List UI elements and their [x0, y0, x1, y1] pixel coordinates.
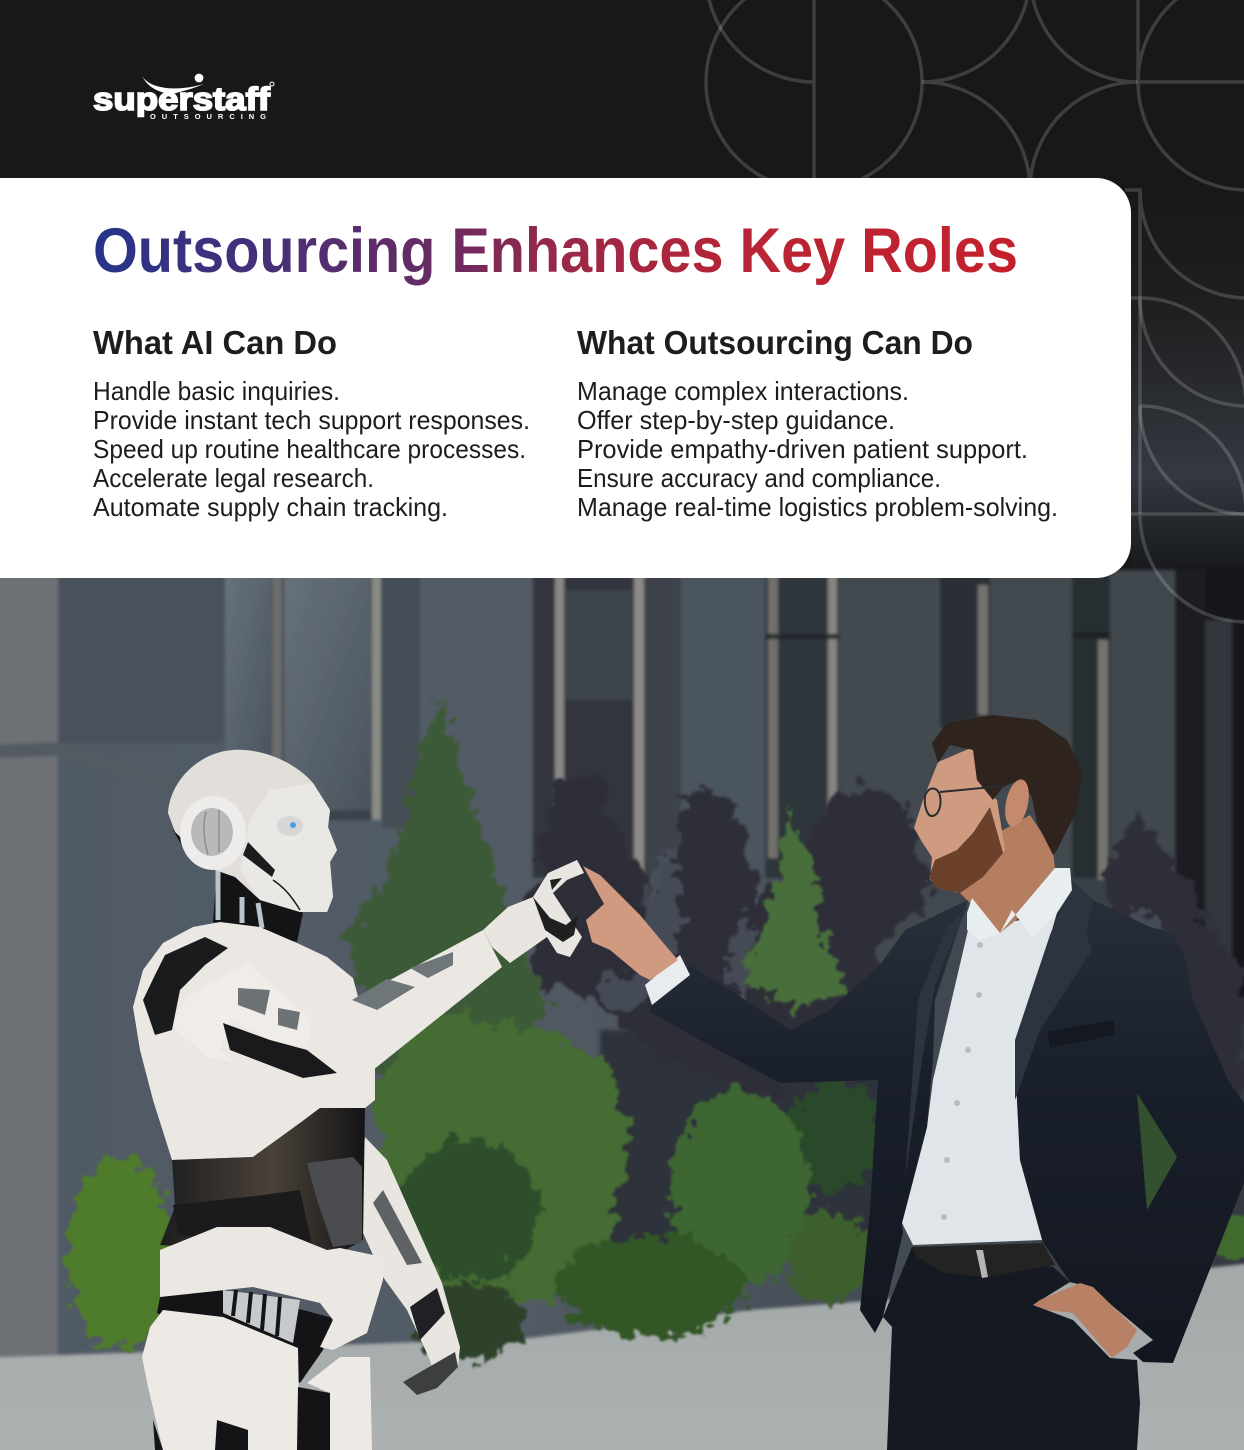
robot forearm vents	[352, 952, 453, 1010]
list: outsourcing capabilities: Provide empathy-driven patient support.	[577, 434, 1028, 464]
robot far leg	[307, 1357, 372, 1450]
gap between sleeve and body	[1137, 1093, 1177, 1210]
right edge fade into building	[1131, 190, 1244, 620]
robot cables	[218, 870, 262, 928]
white content panel	[0, 178, 1131, 578]
robot forearm	[310, 930, 502, 1090]
dark wall base behind garden	[600, 1030, 890, 1250]
logo figure head	[195, 74, 203, 82]
robot ear disc	[191, 808, 233, 856]
conifer upper	[345, 695, 550, 1090]
far arm shell	[360, 1137, 460, 1387]
list: outsourcing capabilities: Ensure accuracy and compliance.	[577, 463, 941, 493]
rib gaps	[233, 1290, 280, 1336]
robot hand	[483, 860, 584, 963]
rib base	[223, 1290, 300, 1343]
robot eye	[290, 822, 296, 828]
man neck	[957, 815, 1057, 933]
man pointing hand	[583, 866, 678, 980]
robot face	[240, 783, 337, 912]
list: AI capabilities: Provide instant tech support responses.	[93, 405, 530, 435]
robot eye socket	[277, 816, 303, 836]
heading: what AI can do: What AI Can Do	[93, 324, 337, 361]
pavement	[0, 1262, 1244, 1450]
list: AI capabilities: Accelerate legal research.	[93, 463, 374, 493]
far arm wrist	[410, 1288, 445, 1340]
robot hand joints	[533, 878, 578, 942]
conifer shadow	[400, 1140, 540, 1280]
heading: what outsourcing can do: What Outsourcing Can Do	[577, 324, 973, 361]
list: outsourcing capabilities: Offer step-by-step guidance.	[577, 405, 895, 435]
man cuff	[645, 955, 690, 1005]
shrub highlights	[595, 850, 1163, 1008]
photo: building and garden backdrop	[0, 570, 1244, 1450]
photo: businessman	[583, 715, 1244, 1450]
logo swoosh	[142, 76, 204, 94]
robot head	[168, 750, 337, 912]
list: outsourcing capabilities: Manage real-time logistics problem-solving.	[577, 492, 1058, 522]
logo tagline: OUTSOURCING	[150, 112, 266, 121]
dark header background	[0, 0, 1244, 640]
robot far arm	[360, 1137, 460, 1395]
man collar	[967, 868, 1072, 940]
far arm vent	[373, 1190, 422, 1265]
man hand in pocket	[1033, 1283, 1137, 1358]
robot shoulder dark	[143, 937, 228, 1035]
round green bushes	[68, 1080, 1244, 1360]
robot thigh cutout	[215, 1420, 248, 1450]
robot leg gap	[297, 1387, 330, 1450]
robot cheek line	[273, 880, 300, 910]
logo wordmark: superstaff	[93, 81, 270, 117]
green accent tree	[745, 812, 845, 1010]
list: AI capabilities: Speed up routine healthcare processes.	[93, 434, 526, 464]
robot jaw plate	[243, 842, 275, 877]
man beard	[929, 807, 1003, 893]
robot side mesh	[307, 1157, 362, 1247]
photo: robot	[133, 750, 584, 1450]
list: AI capabilities: Automate supply chain tracking.	[93, 492, 448, 522]
list: AI capabilities	[93, 376, 530, 522]
man shirt	[902, 913, 1057, 1245]
robot shoulder vents	[238, 988, 300, 1030]
building column and windows	[0, 570, 1244, 1370]
man belt buckle	[976, 1250, 988, 1278]
column: what AI can do	[93, 324, 530, 522]
robot waist	[160, 1108, 365, 1257]
man glasses	[925, 786, 1003, 816]
man hair	[932, 715, 1082, 855]
robot near thigh	[142, 1310, 300, 1450]
robot upper arm plate	[175, 963, 312, 1062]
logo registered mark	[270, 82, 274, 86]
column: what outsourcing can do	[577, 324, 1058, 522]
list: outsourcing capabilities	[577, 376, 1058, 522]
far hand	[403, 1352, 458, 1395]
man face	[914, 747, 1005, 893]
geometric line pattern	[706, 0, 1244, 622]
man ear	[1001, 777, 1033, 829]
robot torso	[133, 922, 375, 1160]
title: Outsourcing Enhances Key Roles	[93, 216, 1018, 286]
list: AI capabilities: Handle basic inquiries.	[93, 376, 340, 406]
conifer lower	[375, 1010, 630, 1300]
robot rib cables	[223, 1290, 300, 1343]
logo: SuperStaff	[93, 74, 274, 121]
robot lower waist band	[173, 1190, 312, 1245]
robot neck	[173, 830, 303, 942]
list: outsourcing capabilities: Manage complex interactions.	[577, 376, 909, 406]
robot thigh sliver	[153, 1420, 163, 1450]
building wall	[0, 578, 1244, 1368]
robot elbow joint	[223, 1023, 337, 1078]
conifer tree	[345, 695, 630, 1300]
robot pelvis	[157, 1288, 333, 1383]
robot ear ring	[180, 796, 246, 870]
man belt	[912, 1243, 1055, 1277]
man jacket pocket	[1047, 1020, 1115, 1048]
robot ear disc grooves	[204, 810, 219, 855]
man jacket	[650, 900, 968, 1333]
man jacket right side	[1015, 880, 1244, 1363]
man trousers	[883, 1247, 1140, 1450]
robot hip belt	[160, 1227, 383, 1350]
dark purple shrubs	[530, 770, 1244, 1100]
man shirt buttons	[941, 942, 983, 1220]
man jacket lapels	[905, 880, 1093, 1180]
